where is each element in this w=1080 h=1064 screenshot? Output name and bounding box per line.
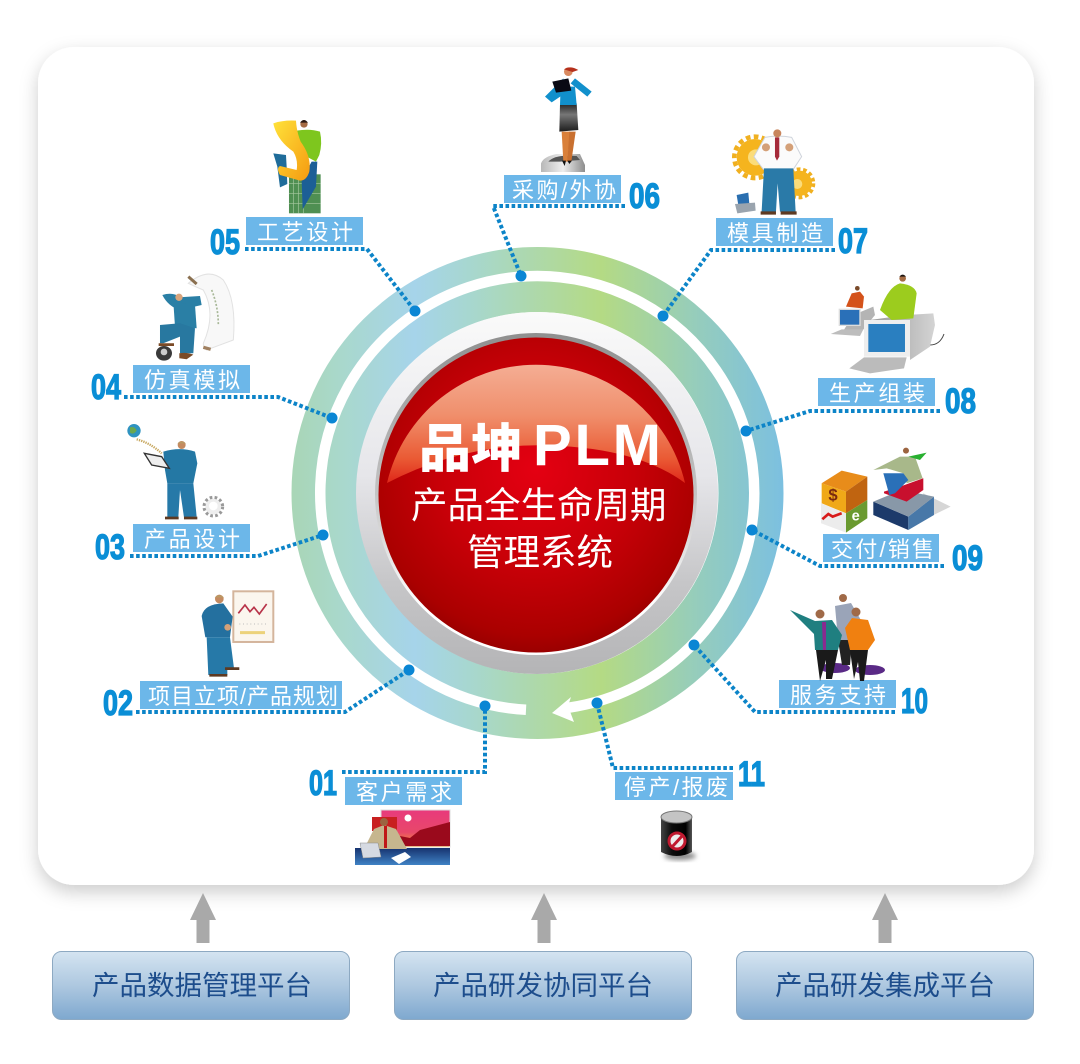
- label 02 项目立项/产品规划: [103, 681, 342, 723]
- center title: 管理系统: [467, 532, 613, 573]
- connector 02: [136, 664, 414, 712]
- label 09 交付/销售: [823, 534, 983, 578]
- platform box: 产品研发集成平台: 产品研发集成平台: [775, 971, 995, 1001]
- connector 08: [740, 411, 940, 436]
- label 07 模具制造: 模具制造: [727, 221, 823, 246]
- lifecycle ring diagram: [320, 276, 754, 722]
- panel: main white card: [38, 47, 1034, 885]
- icon 09: finance cubes and man on block: [821, 448, 951, 533]
- center title: PLM: [533, 413, 661, 478]
- label 04 仿真模拟: [91, 365, 250, 407]
- label 05 工艺设计: 工艺设计: [257, 220, 353, 245]
- label 07 模具制造: [716, 218, 868, 261]
- connector 03: [130, 530, 328, 556]
- gradient ring band: [324, 280, 751, 706]
- center title: 产品全生命周期: [411, 485, 666, 526]
- label 04 仿真模拟: 04: [91, 368, 121, 407]
- icon 08: two workers at laptops: [831, 275, 944, 373]
- silver bezel: [356, 312, 718, 674]
- label 02 项目立项/产品规划: 02: [103, 684, 133, 723]
- label 05 工艺设计: 05: [210, 223, 240, 262]
- icon 11: black trash bin: [661, 811, 696, 860]
- connector 07: [658, 250, 835, 322]
- icon 05: man with yellow scroll on building: [273, 120, 321, 213]
- connector 11: [592, 698, 733, 768]
- label 11 停产/报废: [615, 755, 765, 800]
- label 11 停产/报废: 11: [738, 755, 765, 794]
- label 01 客户需求: [309, 764, 462, 805]
- arrow: up from data platform: [190, 893, 216, 943]
- red glossy sphere: [378, 338, 694, 652]
- bezel inner rim: [375, 333, 697, 655]
- label 06 采购/外协: 采购/外协: [512, 178, 616, 203]
- label 07 模具制造: 07: [838, 222, 868, 261]
- center title: 品坤: [419, 407, 523, 482]
- label 01 客户需求: 01: [309, 764, 337, 803]
- connector 09: [746, 524, 944, 566]
- arrow: up from integration platform: [872, 893, 898, 943]
- label 06 采购/外协: 06: [629, 177, 660, 216]
- icon 10: three businessmen: [790, 594, 885, 681]
- icon 09: finance cubes and man on block: $: [828, 486, 838, 505]
- arrow: up from collaboration platform: [531, 893, 557, 943]
- label 11 停产/报废: 停产/报废: [624, 775, 728, 800]
- connector 01: [342, 700, 490, 772]
- platform box: 产品研发协同平台: 产品研发协同平台: [433, 971, 653, 1001]
- icon 01: executive at desk with sunset: [355, 810, 450, 865]
- label 05 工艺设计: [210, 217, 363, 262]
- platform box: 产品研发协同平台: [394, 952, 692, 1020]
- label 03 产品设计: [95, 524, 250, 567]
- label 10 服务支持: 服务支持: [790, 683, 886, 708]
- label 01 客户需求: 客户需求: [356, 780, 452, 805]
- platform box: 产品数据管理平台: 产品数据管理平台: [92, 971, 312, 1001]
- connector 06: [493, 206, 625, 282]
- label 10 服务支持: 10: [901, 682, 928, 721]
- icon 07: man with gold gears and toolbox: [734, 129, 813, 215]
- icon 03: designer with laptop and gear: [127, 424, 223, 519]
- platform box: 产品数据管理平台: [52, 952, 350, 1020]
- label 09 交付/销售: 09: [952, 539, 983, 578]
- label 09 交付/销售: 交付/销售: [831, 537, 934, 562]
- label 03 产品设计: 产品设计: [144, 527, 240, 552]
- connector 05: [245, 249, 420, 316]
- white circular arrow: [320, 276, 754, 722]
- label 10 服务支持: [779, 680, 928, 721]
- connector 04: [124, 397, 338, 424]
- label 08 生产组装: [818, 378, 976, 421]
- icon 02: presenter with chart board: [202, 591, 273, 677]
- icon 09: finance cubes and man on block: e: [852, 509, 860, 525]
- icon 04: kneeling man with white scroll: [156, 274, 234, 361]
- label 02 项目立项/产品规划: 项目立项/产品规划: [148, 684, 338, 709]
- label 06 采购/外协: [504, 175, 660, 216]
- label 08 生产组装: 生产组装: [829, 381, 925, 406]
- label 08 生产组装: 08: [945, 382, 976, 421]
- center title: [411, 407, 666, 573]
- label 03 产品设计: 03: [95, 528, 125, 567]
- label 04 仿真模拟: 仿真模拟: [144, 368, 240, 393]
- connector 10: [688, 640, 895, 712]
- platform box: 产品研发集成平台: [736, 952, 1034, 1020]
- icon 06: woman on phone with folder on pedestal: [541, 67, 592, 172]
